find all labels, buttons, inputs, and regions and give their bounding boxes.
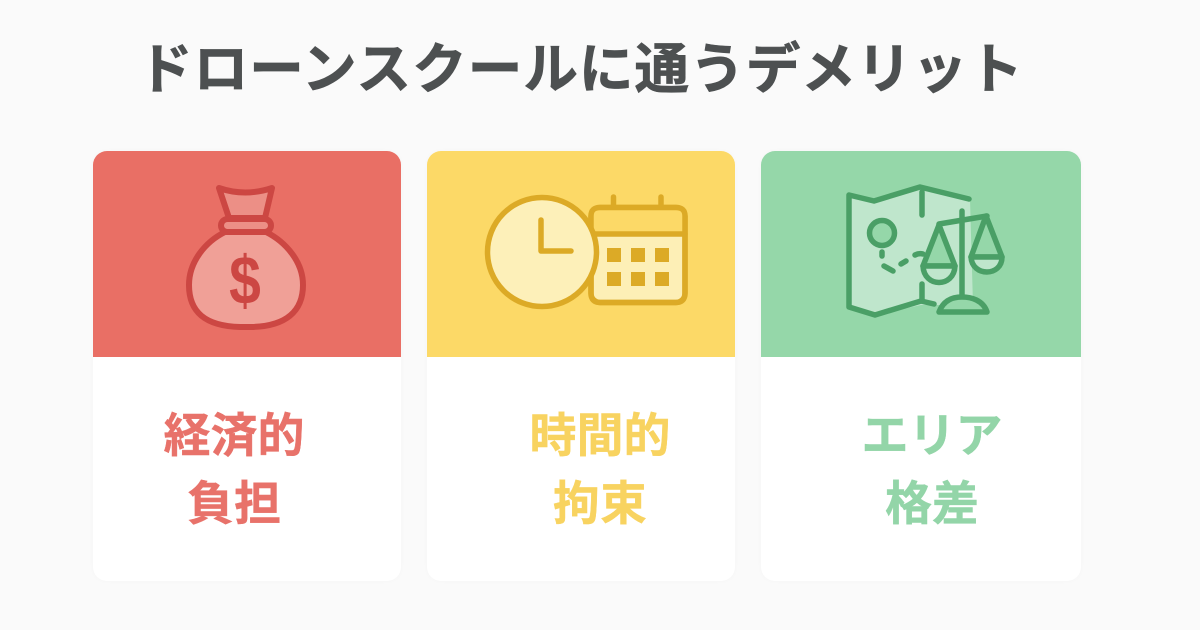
icon: money bag (186, 185, 306, 330)
panel: economic burden (93, 151, 401, 581)
label: time constraint: 拘束 (553, 477, 647, 530)
icon: map and balance scale (846, 184, 1005, 318)
icon panel: clock and calendar on yellow (427, 151, 735, 357)
label: economic burden (164, 409, 304, 530)
icon panel: money bag on red (93, 151, 401, 357)
icon: money bag: $ (229, 243, 261, 319)
label: time constraint: 時間的 (530, 409, 670, 462)
label: area disparity: エリア (862, 409, 1002, 462)
panel: time constraint (427, 151, 735, 581)
panel: area disparity (761, 151, 1081, 581)
label: area disparity: 格差 (885, 477, 979, 530)
title: ドローンスクールに通うデメリット (138, 39, 1024, 100)
icon panel: map and scales on green (761, 151, 1081, 357)
label: area disparity (862, 409, 1002, 530)
icon: clock and calendar (484, 194, 688, 310)
label: economic burden: 負担 (187, 477, 281, 530)
label: economic burden: 経済的 (164, 409, 304, 462)
label: time constraint (530, 409, 670, 530)
